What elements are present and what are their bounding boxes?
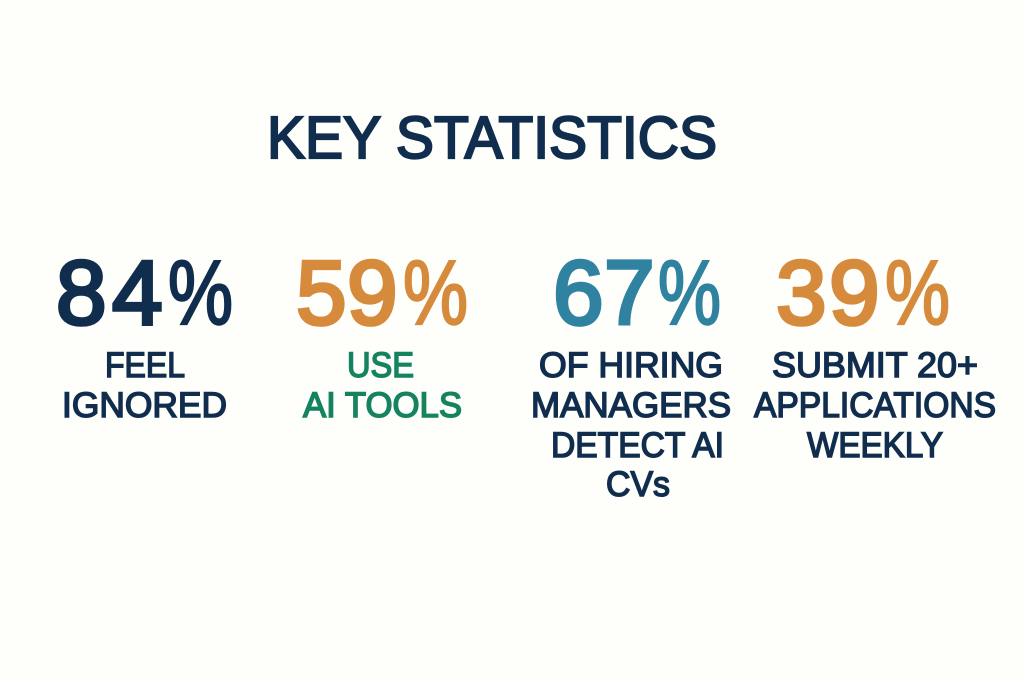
label: use AI tools: USE [347,346,414,385]
stat: 39% submit 20+ applications weekly [754,243,996,465]
label: of hiring managers detect AI CVs: OF HIRING [539,346,723,385]
label: feel ignored: IGNORED [62,386,227,425]
number: 84%: % [168,243,233,344]
number: 67%: % [658,243,721,344]
number: 39%: 39 [776,243,880,344]
title: KEY STATISTICS [267,105,717,171]
label: feel ignored: FEEL [105,346,185,385]
stat: 84% feel ignored [56,243,233,425]
label: feel ignored [62,346,227,425]
number: 39%: % [885,243,950,344]
label: of hiring managers detect AI CVs: MANAGERS [531,386,731,425]
label: use AI tools [303,346,462,425]
label: submit 20+ applications weekly [754,346,996,465]
stat: 67% of hiring managers detect AI CVs [531,243,731,504]
label: submit 20+ applications weekly: APPLICATIONS [754,386,996,425]
label: use AI tools: AI TOOLS [303,386,462,425]
number: 59%: 59 [296,243,398,344]
number: 84%: 84 [56,243,163,344]
label: submit 20+ applications weekly: SUBMIT 20+ [772,346,978,385]
label: submit 20+ applications weekly: WEEKLY [807,426,943,465]
number: 67%: 67 [553,243,655,344]
stat: 59% use AI tools [296,243,468,425]
label: of hiring managers detect AI CVs [531,346,731,504]
label: of hiring managers detect AI CVs: DETECT AI [551,426,724,465]
number: 59%: % [403,243,468,344]
label: of hiring managers detect AI CVs: CVs [606,465,670,504]
